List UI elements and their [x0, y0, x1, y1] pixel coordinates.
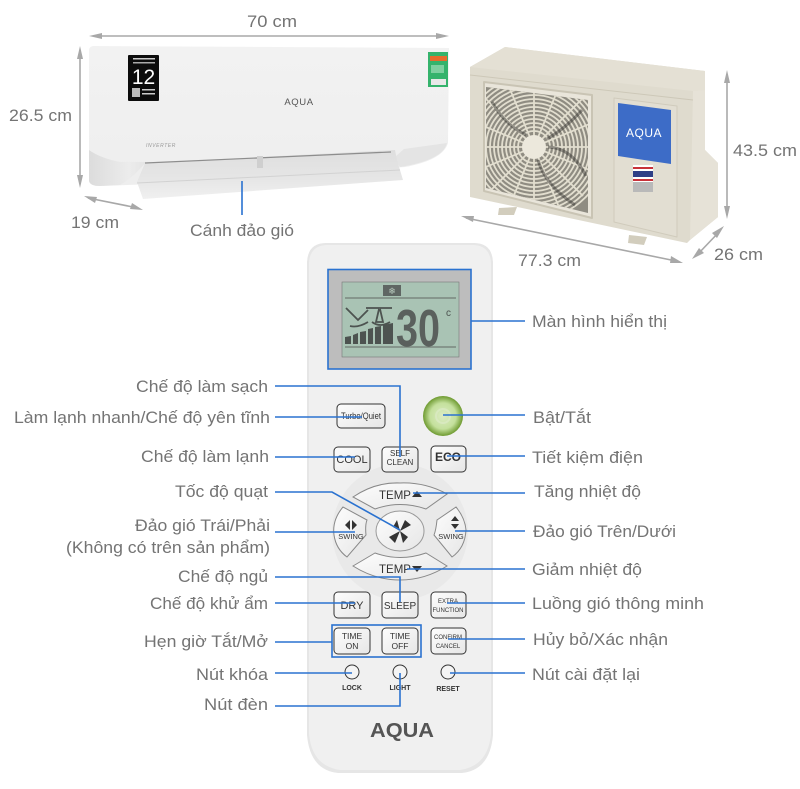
button: Turbo/Quiet — [337, 404, 385, 428]
callout: Chế độ khử ẩm: Chế độ khử ẩm — [150, 594, 268, 613]
callout: Đảo gió Trái/Phải — [66, 516, 355, 557]
button: Extra Function — [431, 592, 466, 618]
button: Time On — [334, 628, 370, 654]
button cluster — [332, 464, 468, 600]
button: Cool: COOL — [336, 454, 368, 466]
callout: Chế độ làm sạch: Chế độ làm sạch — [136, 377, 268, 396]
button: Swing right: SWING — [438, 532, 464, 541]
dimension: height 26.5 cm — [9, 46, 83, 188]
dimension: depth 19 cm — [71, 196, 143, 232]
callout: Bật/Tắt: Bật/Tắt — [533, 408, 591, 427]
outdoor unit — [462, 47, 718, 245]
button: Self Clean: CLEAN — [387, 458, 414, 467]
made in Thailand flag — [633, 165, 653, 192]
callout: Hẹn giờ Tắt/Mở: Hẹn giờ Tắt/Mở — [144, 632, 268, 651]
callout: Chế độ ngủ: Chế độ ngủ — [178, 567, 268, 586]
callout: Tốc độ quạt: Tốc độ quạt — [175, 482, 268, 501]
indoor unit — [89, 46, 449, 199]
label: flap — [190, 181, 294, 240]
button: fan speed — [376, 511, 424, 551]
button: Time On: TIME — [342, 631, 362, 641]
button: Temp up — [353, 483, 447, 509]
button: Time Off — [382, 628, 418, 654]
fan hub — [522, 135, 546, 159]
button: Eco — [431, 446, 466, 472]
callout: Nút khóa: Nút khóa — [196, 665, 269, 684]
LCD screen: ❄ — [388, 287, 396, 297]
dimension: width 70 cm — [89, 12, 449, 39]
button: Time Off: TIME — [390, 631, 410, 641]
callout: Màn hình hiển thị: Màn hình hiển thị — [532, 312, 667, 331]
dimension: height 43.5 cm: 43.5 cm — [733, 141, 797, 160]
button: Self Clean — [382, 447, 418, 472]
callout: Nút đèn: Nút đèn — [204, 695, 268, 714]
dimension: width 77.3 cm — [461, 216, 683, 270]
button: Sleep: SLEEP — [384, 601, 416, 612]
callout: Tốc độ quạt — [175, 482, 400, 530]
button: Time On: ON — [346, 641, 358, 651]
remote logo: AQUA — [370, 720, 434, 742]
dimension: height 43.5 cm — [724, 70, 797, 219]
button: power — [423, 396, 463, 436]
button: Swing left — [334, 507, 367, 557]
button: Lock: LOCK — [342, 685, 362, 692]
button: Extra Function: EXTRA — [438, 599, 458, 605]
energy label — [428, 52, 448, 87]
callout: Đảo gió Trái/Phải: Đảo gió Trái/Phải — [135, 516, 270, 535]
callout: Nút đèn — [204, 673, 400, 714]
callout: Tiết kiệm điện: Tiết kiệm điện — [532, 448, 643, 467]
button: Sleep — [382, 592, 418, 618]
button: Turbo/Quiet: Turbo/Quiet — [341, 411, 381, 421]
button: Eco: ECO — [435, 450, 461, 464]
button: Cool — [334, 447, 370, 472]
button: Dry — [334, 592, 370, 618]
callout: Hủy bỏ/Xác nhận: Hủy bỏ/Xác nhận — [533, 630, 668, 649]
air deflector flap — [137, 150, 403, 199]
label: flap: Cánh đảo gió — [190, 221, 294, 240]
button: Confirm Cancel — [431, 628, 466, 654]
callout: Chế độ làm lạnh: Chế độ làm lạnh — [141, 447, 269, 466]
button: Reset: RESET — [436, 686, 460, 693]
button: Temp down: TEMP — [379, 564, 411, 576]
LCD screen — [328, 270, 471, 369]
callout: Giảm nhiệt độ: Giảm nhiệt độ — [532, 560, 642, 579]
callout: Đảo gió Trái/Phải: (Không có trên sản phẩm) — [66, 538, 270, 557]
callout: Đảo gió Trên/Dưới: Đảo gió Trên/Dưới — [533, 522, 676, 541]
button: Temp down — [353, 553, 447, 580]
feet — [498, 207, 517, 215]
button: Swing left: SWING — [338, 532, 364, 541]
dimension: width 70 cm: 70 cm — [247, 12, 297, 31]
button: Swing right — [434, 507, 466, 557]
callout: Tăng nhiệt độ: Tăng nhiệt độ — [534, 482, 641, 501]
indoor logo: AQUA — [284, 97, 314, 108]
dimension: depth 19 cm: 19 cm — [71, 213, 119, 232]
button: Self Clean: SELF — [390, 449, 410, 458]
callout: Luồng gió thông minh: Luồng gió thông minh — [532, 594, 704, 613]
callout: Chế độ ngủ — [178, 567, 400, 602]
callout: Hẹn giờ Tắt/Mở — [144, 625, 421, 657]
fan grille — [486, 87, 588, 213]
dimension: depth 26 cm: 26 cm — [714, 245, 763, 264]
remote control — [307, 243, 493, 773]
dimension: height 26.5 cm: 26.5 cm — [9, 106, 72, 125]
LCD screen: c — [446, 308, 451, 319]
button: Reset — [436, 665, 460, 693]
outdoor logo panel: AQUA — [626, 126, 662, 140]
inverter mark: INVERTER — [146, 143, 176, 149]
dimension: width 77.3 cm: 77.3 cm — [518, 251, 581, 270]
button: Confirm Cancel: CONFIRM — [434, 635, 462, 641]
callout: Màn hình hiển thị — [328, 270, 667, 369]
callout: Làm lạnh nhanh: Làm lạnh nhanh/Chế độ yên tĩnh — [14, 408, 270, 427]
callout: Chế độ làm sạch — [136, 377, 400, 457]
button: Temp up: TEMP — [379, 490, 411, 502]
button: Light — [390, 665, 411, 692]
LCD screen: 30 — [396, 300, 440, 358]
button: Time Off: OFF — [392, 641, 408, 651]
button: Lock — [342, 665, 362, 692]
outdoor logo panel — [618, 103, 671, 164]
energy warranty badge: 12 — [132, 66, 155, 89]
button: Light: LIGHT — [390, 685, 411, 692]
callout: Nút cài đặt lại: Nút cài đặt lại — [532, 665, 640, 684]
button: Confirm Cancel: CANCEL — [436, 644, 461, 650]
dimension: depth 26 cm — [692, 226, 763, 264]
energy warranty badge — [128, 55, 159, 101]
button: Dry: DRY — [340, 600, 364, 612]
button: Extra Function: FUNCTION — [432, 608, 464, 614]
